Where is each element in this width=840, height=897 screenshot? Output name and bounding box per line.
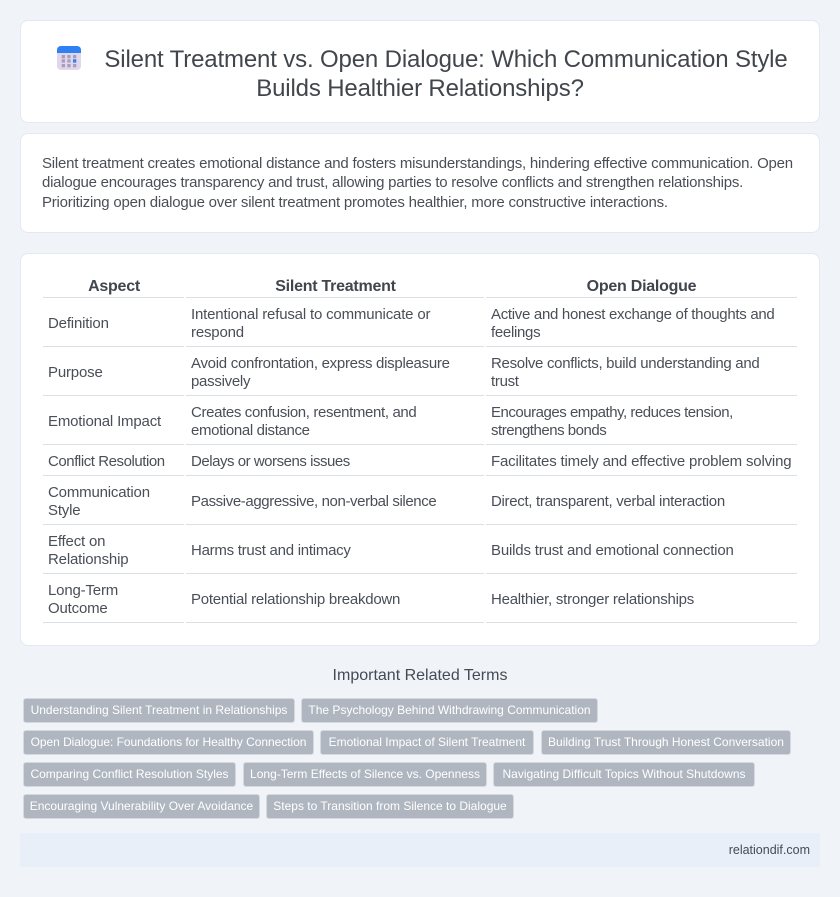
footer bar	[20, 833, 820, 867]
tag	[493, 762, 755, 787]
cell: purpose open: trust	[491, 373, 519, 390]
tag: Emotional Impact of Silent Treatment	[329, 735, 525, 749]
tag	[23, 762, 236, 787]
title: Silent Treatment vs. Open Dialogue: Which Communication Style	[104, 46, 788, 73]
title	[104, 46, 788, 102]
cell: definition silent	[191, 306, 430, 341]
heading: related terms: Important Related Terms	[333, 667, 507, 684]
row: definition: Definition	[48, 315, 109, 332]
row: conflict resolution: Conflict Resolution	[48, 453, 165, 470]
comparison table	[43, 278, 797, 623]
panel: title header	[20, 20, 820, 123]
row: communication style	[48, 484, 150, 519]
intro text	[42, 154, 793, 211]
intro text: dialogue encourages transparency and trust, allowing parties to resolve conflicts and strengthen relationships.	[42, 174, 743, 191]
cell: definition open	[491, 306, 774, 341]
tag	[266, 794, 514, 819]
cell: emotional silent	[191, 404, 416, 439]
tag: Navigating Difficult Topics Without Shutdowns	[502, 767, 746, 781]
intro text: Silent treatment creates emotional distance and fosters misunderstandings, hindering effective communication. Open	[42, 154, 793, 172]
table header: aspect: Aspect	[88, 278, 140, 295]
cell: definition silent: respond	[191, 324, 244, 341]
tag: The Psychology Behind Withdrawing Communication	[308, 703, 591, 717]
row: effect on relationship: Relationship	[48, 551, 128, 568]
intro text: Prioritizing open dialogue over silent treatment promotes healthier, more constructive interactions.	[42, 194, 668, 211]
tag: Long-Term Effects of Silence vs. Openness	[250, 767, 480, 781]
row: long-term outcome	[48, 582, 118, 617]
tag	[301, 698, 598, 723]
tag	[320, 730, 534, 755]
footer text: relationdif.com	[729, 843, 810, 857]
tag: Encouraging Vulnerability Over Avoidance	[30, 799, 253, 813]
row: communication style: Communication	[48, 484, 150, 501]
tag	[23, 698, 295, 723]
row: purpose: Purpose	[48, 364, 103, 381]
panel: intro paragraph	[20, 133, 820, 233]
cell: purpose silent	[191, 355, 450, 390]
row: effect on relationship	[48, 533, 128, 568]
table header: silent treatment: Silent Treatment	[275, 278, 396, 295]
cell: purpose silent: Avoid confrontation, express displeasure	[191, 355, 450, 372]
row: emotional impact: Emotional Impact	[48, 413, 161, 430]
related term tags	[23, 698, 791, 819]
cell: style open: Direct, transparent, verbal interaction	[491, 493, 725, 510]
cell: effect open: Builds trust and emotional connection	[491, 542, 734, 559]
cell: conflict open: Facilitates timely and effective problem solving	[491, 453, 791, 470]
tag: Understanding Silent Treatment in Relationships	[31, 703, 287, 717]
cell: outcome silent: Potential relationship breakdown	[191, 591, 400, 608]
tag: Building Trust Through Honest Conversation	[548, 735, 784, 749]
cell: outcome open: Healthier, stronger relationships	[491, 591, 694, 608]
cell: conflict silent: Delays or worsens issues	[191, 453, 350, 470]
row: long-term outcome: Long-Term	[48, 582, 118, 599]
tag	[23, 730, 314, 755]
cell: emotional open: strengthens bonds	[491, 422, 606, 439]
cell: emotional silent: emotional distance	[191, 422, 310, 439]
cell: style silent: Passive-aggressive, non-verbal silence	[191, 493, 436, 510]
cell: definition open: feelings	[491, 324, 540, 341]
tag	[243, 762, 487, 787]
cell: emotional open: Encourages empathy, reduces tension,	[491, 404, 733, 421]
cell: purpose silent: passively	[191, 373, 250, 390]
row: long-term outcome: Outcome	[48, 600, 108, 617]
tag	[541, 730, 791, 755]
cell: emotional silent: Creates confusion, resentment, and	[191, 404, 416, 421]
tag: Steps to Transition from Silence to Dialogue	[273, 799, 507, 813]
cell: purpose open	[491, 355, 759, 390]
row: effect on relationship: Effect on	[48, 533, 105, 550]
cell: definition silent: Intentional refusal to communicate or	[191, 306, 430, 323]
icon: calendar	[57, 46, 81, 70]
table header: open dialogue: Open Dialogue	[587, 278, 696, 295]
cell: effect silent: Harms trust and intimacy	[191, 542, 351, 559]
tag: Comparing Conflict Resolution Styles	[30, 767, 229, 781]
cell: definition open: Active and honest exchange of thoughts and	[491, 306, 774, 323]
title: Builds Healthier Relationships?	[256, 75, 584, 102]
cell: purpose open: Resolve conflicts, build understanding and	[491, 355, 759, 372]
tag	[23, 794, 260, 819]
panel: comparison table	[20, 253, 820, 646]
cell: emotional open	[491, 404, 733, 439]
tag: Open Dialogue: Foundations for Healthy Connection	[31, 735, 306, 749]
row: communication style: Style	[48, 502, 80, 519]
